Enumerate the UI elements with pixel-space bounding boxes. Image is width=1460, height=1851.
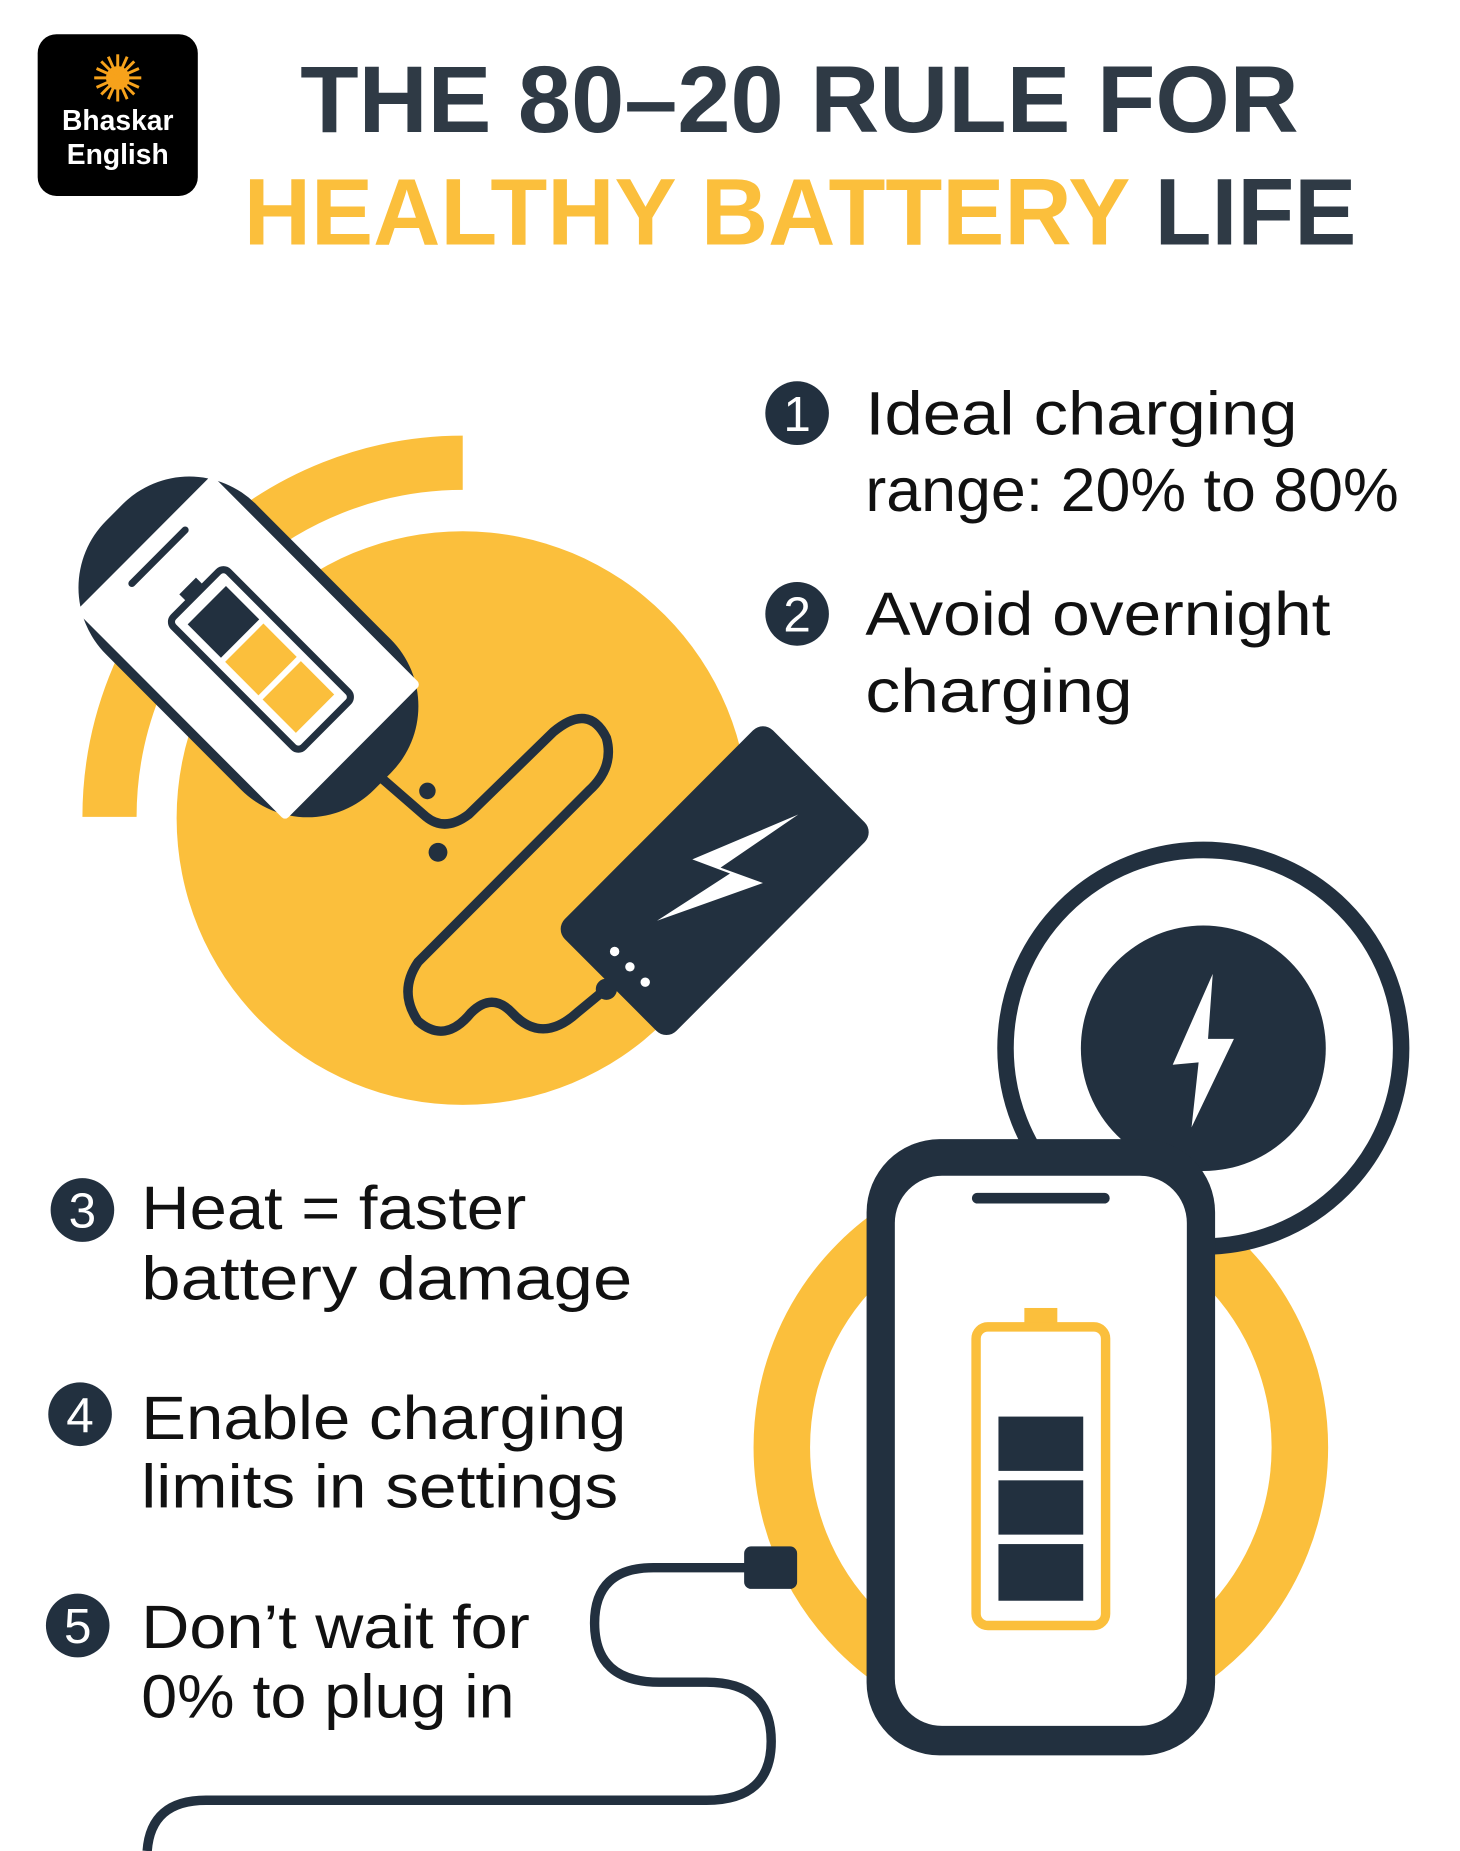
logo: English: [67, 138, 169, 170]
item 1: Ideal charging: [865, 379, 1298, 447]
logo: [38, 34, 198, 196]
illustration: phone and power bank: [39, 437, 875, 1105]
item 3: Heat = faster: [141, 1174, 526, 1242]
item 5: 5: [64, 1599, 91, 1654]
item 4: [48, 1382, 626, 1520]
item 2: 2: [783, 588, 811, 643]
item 3: battery damage: [141, 1245, 632, 1313]
item 3: [51, 1174, 632, 1313]
illustration: wireless charger and phone: [147, 850, 1401, 1851]
item 1: range: 20% to 80%: [865, 456, 1399, 524]
item 5: Don’t wait for: [141, 1593, 530, 1661]
power bank: [555, 720, 875, 1041]
item 1: 1: [783, 387, 811, 442]
item 5: 0% to plug in: [141, 1663, 515, 1731]
title: HEALTHY BATTERY LIFE: [244, 159, 1356, 264]
item 3: 3: [69, 1184, 96, 1239]
title: [244, 47, 1356, 264]
item 4: 4: [66, 1388, 94, 1443]
item 4: limits in settings: [141, 1452, 618, 1520]
cable: [383, 718, 610, 1031]
phone tilted: [39, 437, 457, 856]
icon: lightning bolt: [657, 815, 798, 921]
cable: [147, 1568, 771, 1851]
icon: sun: [94, 54, 141, 102]
logo: Bhaskar: [62, 104, 173, 136]
item 1: [765, 379, 1399, 524]
item 5: [46, 1593, 530, 1731]
item 2: charging: [865, 657, 1133, 725]
phone: [867, 1139, 1215, 1755]
icon: lightning bolt: [1173, 974, 1234, 1127]
item 2: [765, 580, 1330, 725]
item 4: Enable charging: [141, 1384, 626, 1452]
item 2: Avoid overnight: [865, 580, 1330, 648]
title: THE 80–20 RULE FOR: [300, 47, 1299, 152]
